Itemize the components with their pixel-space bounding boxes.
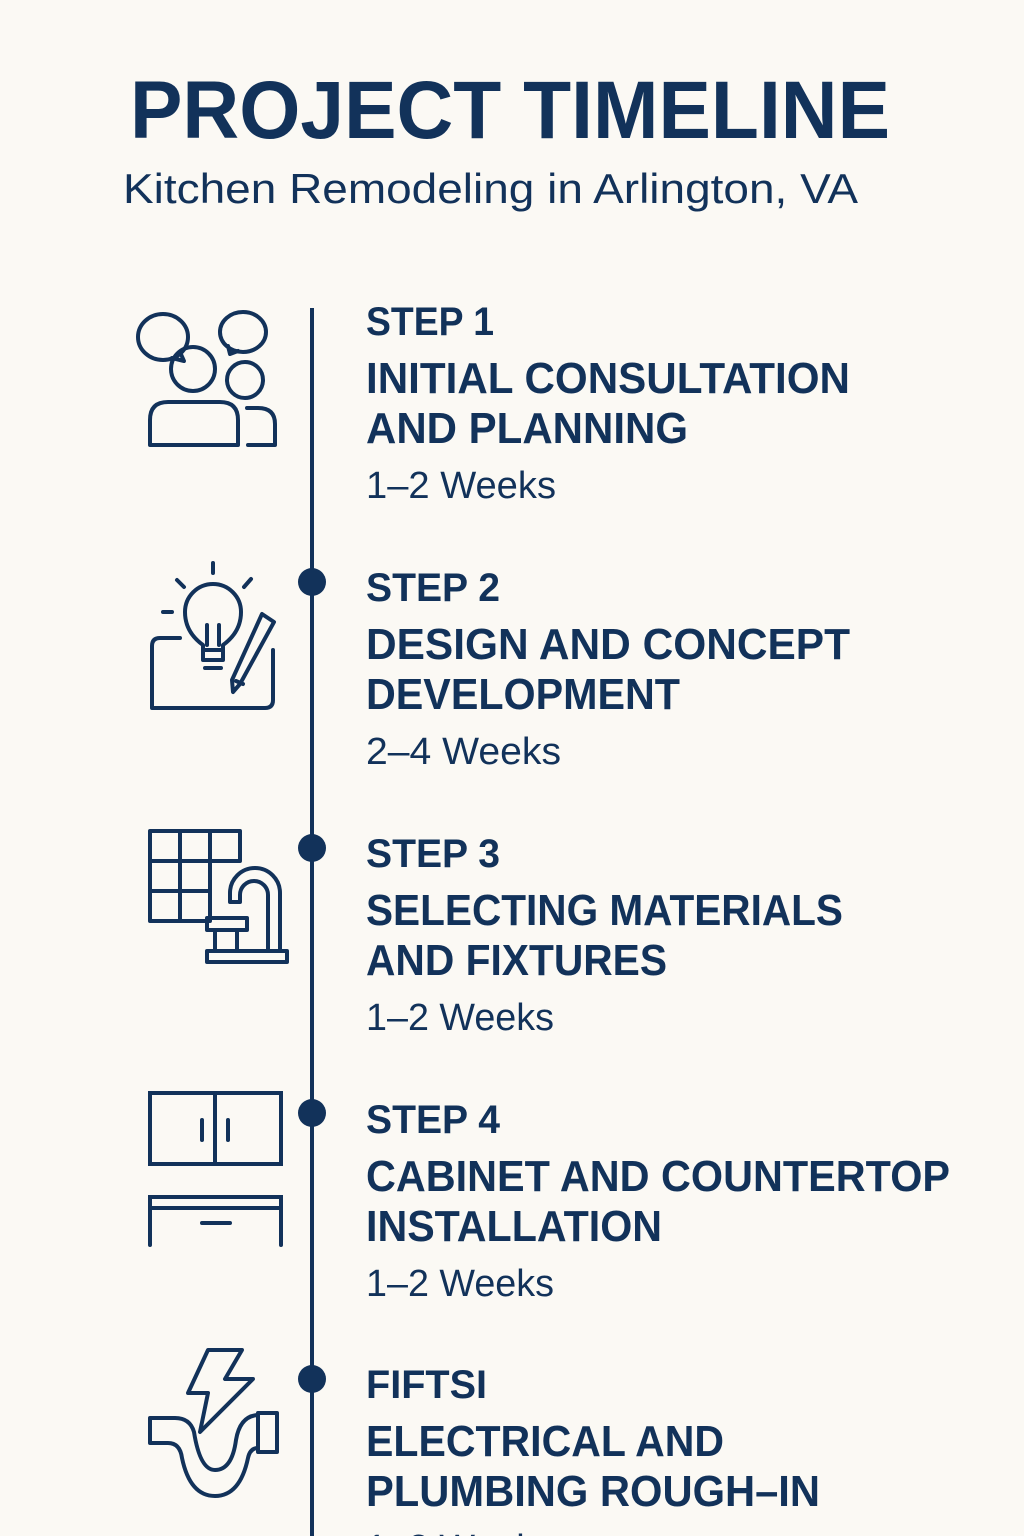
step 2 text: DEVELOPMENT (366, 670, 680, 719)
step 1 text: AND PLANNING (366, 404, 688, 453)
step 4 text (366, 1098, 950, 1305)
step 2 text: STEP 2 (366, 566, 500, 610)
step 1 text: INITIAL CONSULTATION (366, 354, 850, 403)
step 2 text: 2–4 Weeks (366, 731, 561, 773)
icon: bulb and pencil (152, 563, 274, 708)
timeline line (298, 308, 326, 1536)
step 5 text: ELECTRICAL AND (366, 1417, 724, 1466)
step 5 text (366, 1363, 820, 1536)
step 3 text: STEP 3 (366, 832, 500, 876)
step 5 text: PLUMBING ROUGH–IN (366, 1467, 820, 1516)
title: PROJECT TIMELINE (130, 65, 890, 156)
step 3 text: 1–2 Weeks (366, 997, 554, 1039)
icon: electrical and plumbing (150, 1350, 277, 1496)
step 2 text (366, 566, 850, 773)
step 1 text: 1–2 Weeks (366, 465, 556, 507)
icon: tiles and faucet (150, 831, 287, 962)
step 4 text: 1–2 Weeks (366, 1263, 554, 1305)
step 5 text: FIFTSI (366, 1363, 487, 1407)
icon: consultation people (138, 312, 275, 445)
step 1 text: STEP 1 (366, 300, 494, 344)
step 3 text (366, 832, 843, 1039)
subtitle: Kitchen Remodeling in Arlington, VA (123, 165, 858, 212)
step 4 text: INSTALLATION (366, 1202, 662, 1251)
step 1 text (366, 300, 850, 507)
icon: cabinet and counter (150, 1093, 281, 1245)
step 3 text: AND FIXTURES (366, 936, 667, 985)
step 4 text: STEP 4 (366, 1098, 501, 1142)
step 4 text: CABINET AND COUNTERTOP (366, 1152, 950, 1201)
step 2 text: DESIGN AND CONCEPT (366, 620, 850, 669)
step 3 text: SELECTING MATERIALS (366, 886, 843, 935)
